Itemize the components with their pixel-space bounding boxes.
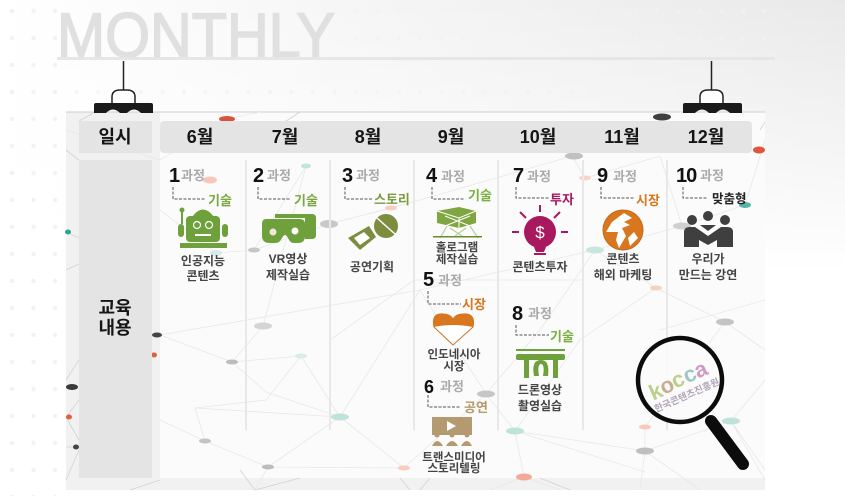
course 9: 과정 bbox=[613, 169, 637, 184]
icon: magnifying glass with kocca logo bbox=[638, 338, 743, 464]
course 5: 시장 bbox=[462, 297, 486, 312]
course 6: 트랜스미디어 bbox=[422, 451, 486, 464]
course 2: 제작실습 bbox=[266, 267, 310, 282]
course 4: 제작실습 bbox=[436, 252, 479, 266]
course 5: 인도네시아 bbox=[428, 348, 481, 361]
course 10: 10 bbox=[676, 165, 697, 187]
course 4 bbox=[426, 165, 492, 266]
icon: theatre screen bbox=[432, 417, 472, 446]
course 3: 3 bbox=[342, 165, 353, 187]
side label: course contents: 내용 bbox=[98, 318, 132, 338]
course 10: 과정 bbox=[700, 168, 724, 183]
course 8: 8 bbox=[512, 303, 523, 325]
logo: kocca: k bbox=[645, 377, 667, 405]
course 6: 6 bbox=[424, 377, 434, 397]
course 7: 콘텐츠투자 bbox=[512, 260, 568, 274]
header: months bar: 7월 bbox=[272, 127, 298, 147]
header: date label bbox=[79, 121, 152, 153]
logo: kocca: o bbox=[656, 371, 678, 400]
course 6: 과정 bbox=[440, 379, 464, 394]
course 6: 공연 bbox=[464, 400, 488, 415]
course 4: 과정 bbox=[441, 169, 465, 184]
course 1: 과정 bbox=[181, 168, 205, 183]
course 8: 촬영실습 bbox=[518, 399, 562, 413]
icon: light bulb: $ bbox=[535, 223, 545, 242]
course 5: 과정 bbox=[438, 273, 462, 288]
course 8: 기술 bbox=[550, 329, 574, 344]
course 9: 콘텐츠 bbox=[606, 252, 640, 266]
header: months bar: 9월 bbox=[438, 127, 464, 147]
course 4: 4 bbox=[426, 165, 438, 187]
course 5: 시장 bbox=[443, 360, 465, 373]
logo: kocca: c bbox=[679, 360, 700, 388]
network background bbox=[65, 112, 765, 490]
course 10: 우리가 bbox=[691, 251, 725, 266]
title: MONTHLY bbox=[57, 1, 775, 71]
icon: right binder clip bbox=[683, 61, 742, 113]
header: months bar: 12월 bbox=[688, 127, 724, 147]
course 2: 과정 bbox=[267, 168, 291, 183]
course 9 bbox=[594, 165, 660, 282]
icon: people group bbox=[684, 211, 733, 247]
logo: kocca bbox=[642, 353, 721, 415]
course 3: 공연기획 bbox=[350, 259, 394, 274]
course 10: 맞춤형 bbox=[712, 191, 747, 206]
header: months bar: 10월 bbox=[520, 127, 556, 147]
course 6: 스토리텔링 bbox=[428, 462, 480, 475]
header: months bar: 11월 bbox=[604, 127, 640, 147]
course 8 bbox=[512, 303, 574, 413]
course 2: 기술 bbox=[294, 193, 318, 208]
panel: calendar sheet bbox=[66, 112, 765, 490]
icon: microphone bbox=[348, 214, 398, 250]
header: months bar bbox=[160, 121, 752, 153]
course 2: VR영상 bbox=[269, 252, 307, 266]
course 7: 과정 bbox=[527, 169, 551, 184]
header: months bar: 6월 bbox=[187, 127, 213, 147]
course 3: 과정 bbox=[356, 168, 380, 183]
course 10 bbox=[676, 165, 747, 282]
icon: drone bbox=[516, 349, 565, 378]
side label: course contents: 교육 bbox=[98, 298, 132, 318]
course 1: 1 bbox=[169, 165, 180, 187]
header: months bar: 8월 bbox=[355, 127, 381, 147]
course 4: 홀로그램 bbox=[436, 240, 478, 254]
course 1: 콘텐츠 bbox=[186, 269, 220, 283]
course 9: 시장 bbox=[636, 193, 660, 208]
header: date label: 일시 bbox=[98, 127, 132, 147]
logo: kocca: c bbox=[667, 365, 688, 393]
icon: VR headset bbox=[262, 214, 316, 243]
course 2: 2 bbox=[253, 165, 264, 187]
course 5: 5 bbox=[423, 269, 434, 291]
icon: robot bbox=[178, 208, 228, 248]
course 1: 인공지능 bbox=[181, 254, 225, 268]
icon: left binder clip bbox=[94, 61, 153, 113]
side label: course contents bbox=[79, 160, 152, 478]
title: MONTHLY: MONTHLY bbox=[57, 1, 335, 71]
course 10: 만드는 강연 bbox=[679, 268, 737, 282]
course 9: 9 bbox=[597, 165, 608, 187]
course 3: 스토리 bbox=[374, 192, 410, 207]
icon: hologram bbox=[433, 207, 482, 238]
course 4: 기술 bbox=[468, 188, 492, 203]
course 2 bbox=[253, 165, 318, 282]
course 3 bbox=[342, 165, 410, 274]
course 6 bbox=[422, 377, 488, 475]
logo: kocca: a bbox=[690, 355, 712, 383]
course 7: 투자 bbox=[550, 192, 574, 207]
course 9: 해외 마케팅 bbox=[594, 267, 652, 282]
logo: kocca: 한국콘텐츠진흥원 bbox=[653, 376, 721, 415]
course 7 bbox=[512, 165, 574, 274]
icon: globe bbox=[603, 210, 643, 250]
course 8: 과정 bbox=[528, 306, 552, 321]
course 7: 7 bbox=[513, 165, 524, 187]
course 1 bbox=[169, 165, 232, 283]
course 8: 드론영상 bbox=[518, 383, 562, 397]
icon: heart bbox=[433, 314, 474, 345]
course 5 bbox=[423, 269, 486, 373]
column dividers bbox=[245, 160, 668, 430]
course 1: 기술 bbox=[208, 193, 232, 208]
